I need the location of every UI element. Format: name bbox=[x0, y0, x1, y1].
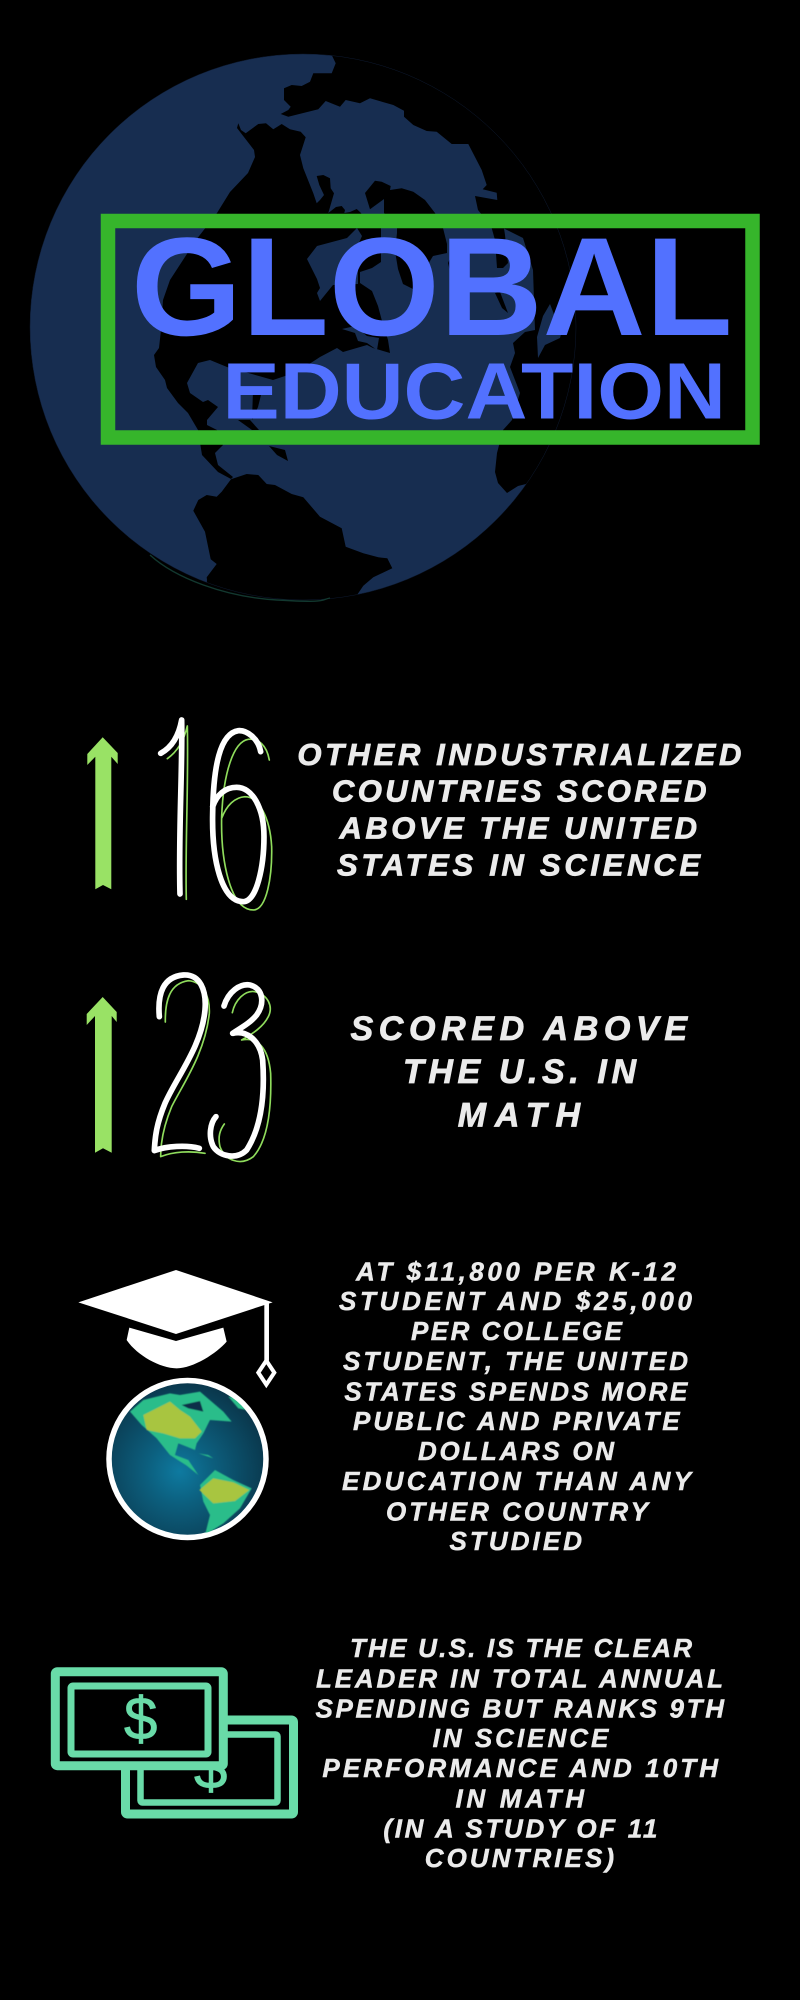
arrow up: math bbox=[87, 997, 117, 1153]
text: spending per student: STUDENT, THE UNITED bbox=[343, 1346, 688, 1376]
text: spending per student: OTHER COUNTRY bbox=[386, 1496, 651, 1526]
text: spending per student bbox=[339, 1256, 694, 1556]
text: total spending and rank: SPENDING BUT RANKS 9TH bbox=[316, 1693, 725, 1723]
icon: dollar bills bbox=[55, 1672, 293, 1814]
text: science statistic: ABOVE THE UNITED bbox=[338, 810, 697, 845]
title: GLOBAL EDUCATION: GLOBAL bbox=[131, 208, 733, 365]
text: math statistic: MATH bbox=[458, 1097, 581, 1135]
text: math statistic: SCORED ABOVE bbox=[350, 1010, 688, 1048]
back bill bbox=[126, 1720, 294, 1814]
text: total spending and rank: PERFORMANCE AND 10TH bbox=[322, 1753, 719, 1783]
front bill bbox=[55, 1672, 223, 1766]
icon: earth globe bbox=[109, 1380, 266, 1538]
text: spending per student: STUDENT AND $25,000 bbox=[339, 1286, 693, 1316]
text: total spending and rank: THE U.S. IS THE CLEAR bbox=[350, 1633, 692, 1663]
text: spending per student: STATES SPENDS MORE bbox=[344, 1376, 688, 1406]
text: total spending and rank: IN MATH bbox=[456, 1783, 585, 1813]
text: total spending and rank: IN SCIENCE bbox=[433, 1723, 609, 1753]
number: 23 bbox=[154, 975, 271, 1161]
title frame bbox=[108, 221, 752, 438]
number: 16 bbox=[161, 720, 272, 910]
title: GLOBAL EDUCATION bbox=[131, 208, 733, 436]
title: GLOBAL EDUCATION: EDUCATION bbox=[222, 346, 726, 436]
back bill: $ bbox=[194, 1734, 227, 1801]
text: math statistic: THE U.S. IN bbox=[403, 1053, 637, 1091]
text: math statistic bbox=[350, 1010, 688, 1135]
text: spending per student: AT $11,800 PER K-12 bbox=[355, 1256, 677, 1286]
text: science statistic: OTHER INDUSTRIALIZED bbox=[297, 737, 741, 772]
icon: graduation cap bbox=[78, 1270, 274, 1385]
arrow up: science bbox=[87, 737, 118, 889]
text: science statistic: STATES IN SCIENCE bbox=[337, 848, 701, 883]
text: spending per student: EDUCATION THAN ANY bbox=[342, 1466, 694, 1496]
text: spending per student: PUBLIC AND PRIVATE bbox=[353, 1406, 680, 1436]
text: science statistic: COUNTRIES SCORED bbox=[332, 774, 706, 809]
text: spending per student: DOLLARS ON bbox=[418, 1436, 615, 1466]
text: total spending and rank: COUNTRIES) bbox=[425, 1843, 614, 1873]
text: spending per student: PER COLLEGE bbox=[411, 1316, 623, 1346]
front bill: $ bbox=[124, 1685, 157, 1752]
background globe bbox=[30, 40, 620, 612]
text: science statistic bbox=[297, 737, 741, 883]
text: total spending and rank bbox=[316, 1633, 725, 1873]
text: total spending and rank: LEADER IN TOTAL ANNUAL bbox=[316, 1664, 723, 1694]
text: spending per student: STUDIED bbox=[450, 1526, 582, 1556]
text: total spending and rank: (IN A STUDY OF 11 bbox=[383, 1813, 657, 1843]
